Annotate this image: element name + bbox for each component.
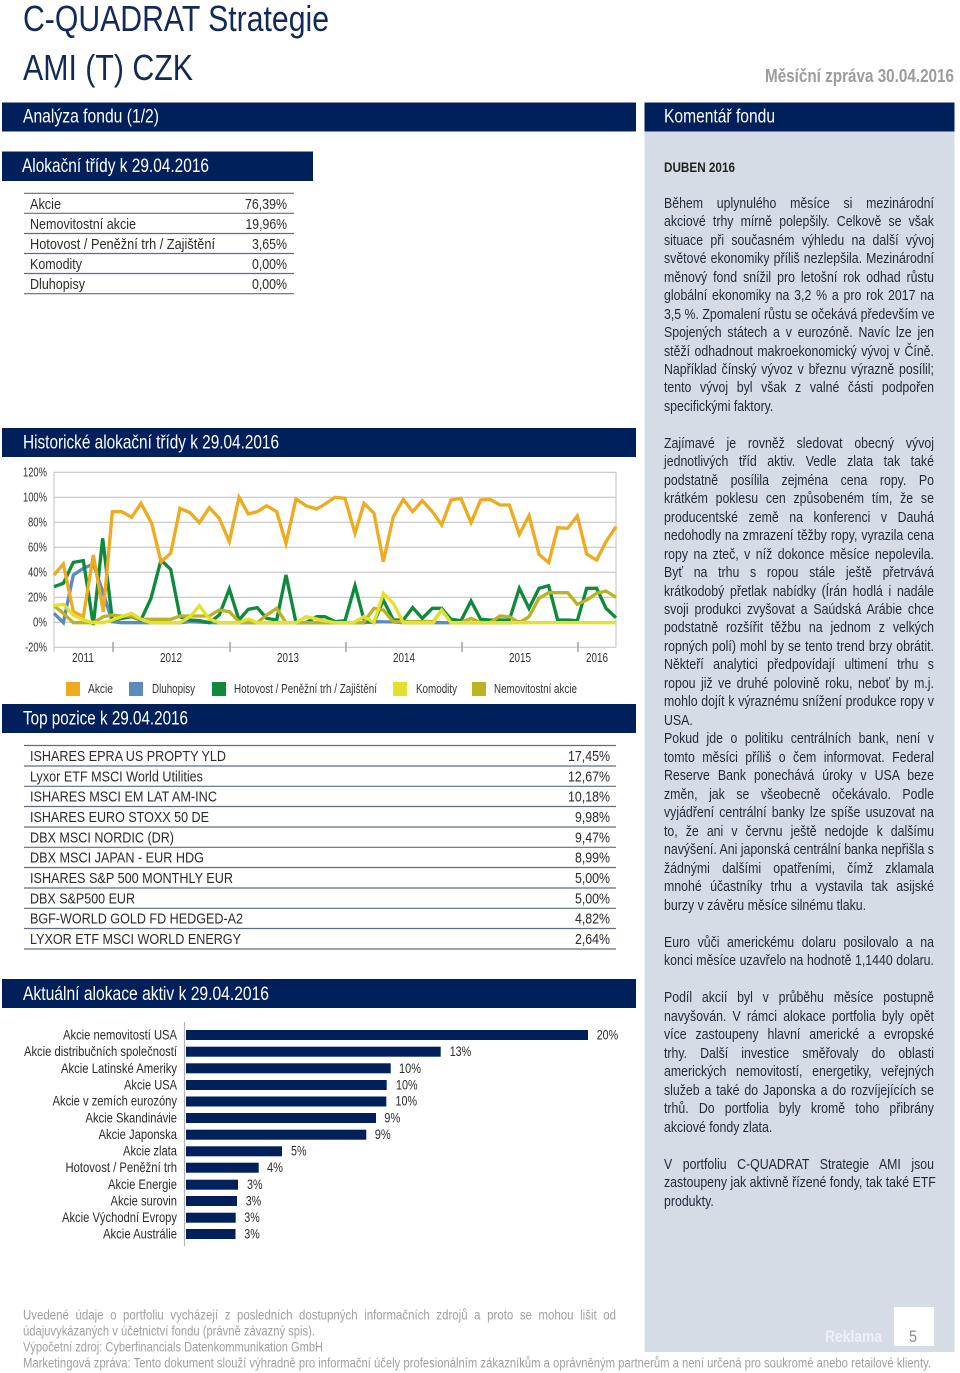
commentary paragraph: asset classes and central banks: USA. <box>664 713 693 729</box>
commentary paragraph: portfolio composition: produkty. <box>664 1194 714 1210</box>
heading: allocation classes <box>2 152 313 181</box>
line chart: historical allocation: 60% <box>28 540 47 554</box>
heading: current asset allocation <box>2 979 636 1008</box>
commentary paragraph: portfolio changes: více zastoupeny hlavní americké a evropské <box>664 1027 934 1043</box>
bar chart: current asset allocation: Akcie Východní Evropy <box>62 1209 177 1225</box>
top positions table: 8,99% <box>575 850 610 867</box>
bar chart: current asset allocation: 9% <box>375 1126 391 1142</box>
commentary paragraph: portfolio changes: amerických nemovitostí, energetiky, veřejných <box>664 1064 934 1080</box>
commentary paragraph: portfolio changes: Podíl akcií byl v průběhu měsíce postupně <box>664 990 934 1006</box>
bar chart: current asset allocation: 4% <box>267 1159 283 1175</box>
top positions table: 10,18% <box>568 789 610 806</box>
top positions table: 4,82% <box>575 911 610 928</box>
footer disclaimer: údajuvykázaných v účetnictví fondu (právně závazný spis). <box>23 1324 315 1338</box>
commentary paragraph: asset classes and central banks: to, že ani v červnu ještě nedojde k dalšímu <box>664 824 934 840</box>
commentary paragraph: asset classes and central banks: vyjádření centrální banky lze spíše usuzovat na <box>664 805 934 821</box>
commentary paragraph: markets overview: Například čínský vývoz v březnu výrazně posílil; <box>664 362 934 378</box>
chart legend: Hotovost / Peněžní trh / Zajištění <box>234 682 377 696</box>
chart legend: Komodity <box>416 682 458 696</box>
commentary paragraph: asset classes and central banks: změn, jak se všeobecně očekávalo. Podle <box>664 787 934 803</box>
commentary paragraph: markets overview: globální ekonomiky na 3,2 % a pro rok 2017 na <box>664 288 934 304</box>
commentary paragraph: markets overview: Spojených státech a v eurozóně. Navíc lze jen <box>664 325 934 341</box>
commentary paragraph: asset classes and central banks <box>664 436 934 914</box>
commentary paragraph: euro: Euro vůči americkému dolaru posilovalo a na <box>664 935 934 951</box>
allocation table: Nemovitostní akcie <box>30 216 136 233</box>
commentary paragraph: asset classes and central banks: navýšení. Ani japonská centrální banka nepřišla s <box>664 842 934 858</box>
bar chart: current asset allocation: 10% <box>396 1076 418 1092</box>
bar chart: current asset allocation: Akcie Japonska <box>98 1126 177 1142</box>
top positions table: Lyxor ETF MSCI World Utilities <box>30 768 203 785</box>
footer disclaimer: Uvedené údaje o portfoliu vycházejí z posledních dostupných informačních zdrojů a proto se mohou lišit od <box>23 1308 616 1322</box>
commentary paragraph: portfolio changes: akciové fondy zlata. <box>664 1120 772 1136</box>
bar chart: current asset allocation: Akcie USA <box>124 1076 178 1092</box>
bar chart: current asset allocation: 13% <box>450 1043 471 1059</box>
commentary paragraph: asset classes and central banks: podstatně posílila zejména cena ropy. Po <box>664 473 934 489</box>
commentary paragraph: portfolio changes: navyšován. V rámci alokace portfolia byly opět <box>664 1009 934 1025</box>
bar chart: current asset allocation: Akcie Latinské Ameriky <box>61 1060 177 1076</box>
heading: top positions <box>2 704 636 733</box>
title <box>23 0 329 88</box>
line chart: historical allocation: 2014 <box>393 651 415 665</box>
heading: fund analysis <box>2 102 636 132</box>
right commentary panel background <box>644 131 954 1352</box>
bar chart: current asset allocation: 3% <box>244 1226 260 1242</box>
bar chart: current asset allocation: Hotovost / Peněžní trh <box>66 1159 177 1175</box>
bar chart: current asset allocation: 10% <box>399 1060 421 1076</box>
commentary paragraph: asset classes and central banks: žádnými dalšími opatřeními, čímž zklamala <box>664 861 934 877</box>
commentary paragraph: asset classes and central banks: ropou již ve druhé polovině roku, neboť by m.j. <box>664 676 934 692</box>
line chart: historical allocation: 2015 <box>509 651 531 665</box>
top positions table: 12,67% <box>568 768 610 785</box>
top positions table: DBX MSCI NORDIC (DR) <box>30 829 174 846</box>
commentary paragraph: portfolio composition: zastoupeny jak aktivně řízené fondy, tak také ETF <box>664 1175 936 1191</box>
commentary month heading: DUBEN 2016 <box>664 159 735 175</box>
commentary paragraph: asset classes and central banks: Zajímavé je rovněž sledovat obecný vývoj <box>664 436 934 452</box>
bar chart: current asset allocation: 20% <box>597 1026 618 1042</box>
commentary paragraph: euro: konci měsíce uzavřelo na hodnotě 1,1440 dolaru. <box>664 953 934 969</box>
chart legend: Akcie <box>88 682 113 696</box>
line chart: historical allocation: 40% <box>28 566 47 580</box>
bar chart: current asset allocation <box>24 1022 618 1246</box>
commentary paragraph: portfolio changes <box>664 990 934 1136</box>
title: AMI (T) CZK <box>23 47 193 88</box>
commentary paragraph: asset classes and central banks: burzy v závěru měsíce silnému tlaku. <box>664 898 866 914</box>
allocation table: 3,65% <box>252 236 287 253</box>
commentary paragraph: portfolio composition <box>664 1157 936 1210</box>
commentary paragraph: asset classes and central banks: Byť na trhu s ropou stále ještě přetrvává <box>664 565 934 581</box>
page number box <box>894 1307 934 1346</box>
commentary paragraph: asset classes and central banks: jednotlivých tříd aktiv. Vedle zlata tak také <box>664 454 934 470</box>
line chart: historical allocation: 2016 <box>586 651 608 665</box>
heading: top positions: Top pozice k 29.04.2016 <box>23 708 188 730</box>
chart legend: Dluhopisy <box>152 682 196 696</box>
commentary paragraph: markets overview: měnový fond snížil pro letošní rok odhad růstu <box>664 270 934 286</box>
heading: allocation classes: Alokační třídy k 29.04.2016 <box>22 155 209 177</box>
allocation table: Komodity <box>30 256 82 273</box>
commentary paragraph: asset classes and central banks: mnohé účastníky trhu a vystavila tak asijské <box>664 879 934 895</box>
bar chart: current asset allocation: 3% <box>246 1192 261 1208</box>
line chart: historical allocation: 2011 <box>72 651 94 665</box>
commentary paragraph: euro <box>664 935 934 969</box>
commentary paragraph: asset classes and central banks: svoji produkci zvyšovat a Saúdská Arábie chce <box>664 602 934 618</box>
commentary paragraph: markets overview: situace při současném výhledu na další vývoj <box>664 233 934 249</box>
commentary paragraph: markets overview: tento vývoj byl však z valné části podpořen <box>664 380 934 396</box>
heading: fund commentary: Komentář fondu <box>664 106 775 128</box>
allocation table: 0,00% <box>252 256 287 273</box>
top positions table: DBX MSCI JAPAN - EUR HDG <box>30 850 204 867</box>
commentary paragraph: asset classes and central banks: nedohodly na zmrazení těžby ropy, vyrazila cena <box>664 528 934 544</box>
bar chart: current asset allocation: Akcie zlata <box>123 1142 177 1158</box>
bar chart: current asset allocation: Akcie Austrálie <box>103 1226 177 1242</box>
commentary paragraph: portfolio changes: služeb a také do Japonska a do rozvíjejících se <box>664 1083 934 1099</box>
commentary paragraph: portfolio changes: trhů. Do portfolia byly kromě toho přibrány <box>664 1101 934 1117</box>
top positions table <box>24 746 616 949</box>
line chart: historical allocation: 2013 <box>277 651 299 665</box>
commentary paragraph: markets overview: specifickými faktory. <box>664 399 773 415</box>
bar chart: current asset allocation: 5% <box>291 1142 306 1158</box>
chart legend <box>66 682 577 696</box>
commentary paragraph: asset classes and central banks: ropy na zteč, v níž dokonce měsíce nepolevila. <box>664 547 934 563</box>
bar chart: current asset allocation: Akcie Skandinávie <box>86 1110 177 1126</box>
page number box: 5 <box>909 1327 917 1346</box>
top positions table: 17,45% <box>568 748 610 765</box>
commentary paragraph: asset classes and central banks: ropných polí) mohl by se tento trend brzy obrátit. <box>664 639 934 655</box>
bar chart: current asset allocation: Akcie nemovitostí USA <box>63 1026 178 1042</box>
allocation table: Dluhopisy <box>30 276 85 293</box>
footer disclaimer: Výpočetní zdroj: Cyberfinancials Datenkommunikation GmbH <box>23 1340 323 1354</box>
bar chart: current asset allocation: 9% <box>384 1110 400 1126</box>
commentary paragraph: markets overview: světové ekonomiky příliš nezlepšila. Mezinárodní <box>664 251 934 267</box>
allocation table: Akcie <box>30 196 61 213</box>
heading: fund analysis: Analýza fondu (1/2) <box>23 106 159 128</box>
commentary paragraph: portfolio changes: trhy. Další investice směřovaly do oblasti <box>664 1046 934 1062</box>
top positions table: DBX S&P500 EUR <box>30 890 135 907</box>
commentary paragraph: asset classes and central banks: Někteří analytici předpovídají ultimení trhu s <box>664 657 934 673</box>
heading: current asset allocation: Aktuální alokace aktiv k 29.04.2016 <box>23 983 269 1005</box>
commentary paragraph: asset classes and central banks: krátkodobý přetlak nabídky (Írán hodlá i nadále <box>664 584 934 600</box>
line chart: historical allocation: 0% <box>33 616 47 630</box>
line chart: historical allocation <box>23 466 616 665</box>
commentary paragraph: asset classes and central banks: krátkém poklesu cen způsobeném tím, že se <box>664 491 934 507</box>
commentary paragraph: asset classes and central banks: Reserve Bank ponechává úroky v USA beze <box>664 768 934 784</box>
commentary paragraph: markets overview: Během uplynulého měsíce si mezinárodní <box>664 196 934 212</box>
top positions table: BGF-WORLD GOLD FD HEDGED-A2 <box>30 911 243 928</box>
heading: fund commentary <box>644 102 954 132</box>
heading: historical allocation: Historické alokační třídy k 29.04.2016 <box>23 432 279 454</box>
commentary paragraph: asset classes and central banks: podstatně rozšířit těžbu na jednom z velkých <box>664 620 934 636</box>
line chart: historical allocation: 120% <box>23 466 47 480</box>
allocation table: Hotovost / Peněžní trh / Zajištění <box>30 236 216 253</box>
allocation table: 19,96% <box>246 216 287 233</box>
bar chart: current asset allocation: Akcie distribučních společností <box>24 1043 177 1059</box>
commentary paragraph: markets overview: akciové trhy mírně polepšily. Celkově se však <box>664 214 934 230</box>
top positions table: ISHARES EPRA US PROPTY YLD <box>30 748 226 765</box>
top positions table: ISHARES S&P 500 MONTHLY EUR <box>30 870 233 887</box>
allocation table: 76,39% <box>245 196 287 213</box>
bar chart: current asset allocation: Akcie surovin <box>110 1192 177 1208</box>
commentary paragraph: asset classes and central banks: producentské země na konferenci v Dauhá <box>664 510 934 526</box>
top positions table: LYXOR ETF MSCI WORLD ENERGY <box>30 931 241 948</box>
commentary paragraph: asset classes and central banks: mohlo dojít k výraznému snížení produkce ropy v <box>664 694 934 710</box>
top positions table: 5,00% <box>575 870 610 887</box>
footer disclaimer <box>23 1308 931 1370</box>
line chart: historical allocation: -20% <box>25 640 47 654</box>
chart legend: Nemovitostní akcie <box>494 682 577 696</box>
top positions table: 2,64% <box>575 931 610 948</box>
commentary paragraph: markets overview <box>664 196 935 415</box>
top positions table: ISHARES EURO STOXX 50 DE <box>30 809 209 826</box>
top positions table: 9,47% <box>575 829 610 846</box>
commentary paragraph: markets overview: stěží odhadnout makroekonomický vývoj v Číně. <box>664 344 934 360</box>
commentary paragraph: asset classes and central banks: tomto měsíci příliš o čem informovat. Federal <box>664 750 934 766</box>
line chart: historical allocation: 2012 <box>160 651 182 665</box>
heading: historical allocation <box>2 428 636 457</box>
line chart: historical allocation: 100% <box>23 490 47 504</box>
bar chart: current asset allocation: 3% <box>247 1176 262 1192</box>
top positions table: 5,00% <box>575 890 610 907</box>
bar chart: current asset allocation: Akcie Energie <box>108 1176 177 1192</box>
allocation table: 0,00% <box>252 276 287 293</box>
commentary paragraph: markets overview: 3,5 %. Zpomalení růstu se očekává především ve <box>664 307 935 323</box>
bar chart: current asset allocation: Akcie v zemích eurozóny <box>52 1092 177 1108</box>
commentary paragraph: asset classes and central banks: Pokud jde o politiku centrálních bank, není v <box>664 731 934 747</box>
allocation table <box>24 193 294 294</box>
bar chart: current asset allocation: 3% <box>244 1209 260 1225</box>
top positions table: ISHARES MSCI EM LAT AM-INC <box>30 789 217 806</box>
top positions table: 9,98% <box>575 809 610 826</box>
line chart: historical allocation: 80% <box>28 516 47 530</box>
commentary paragraph: portfolio composition: V portfoliu C-QUADRAT Strategie AMI jsou <box>664 1157 934 1173</box>
advertising label: Reklama <box>825 1327 882 1346</box>
bar chart: current asset allocation: 10% <box>396 1092 417 1108</box>
line chart: historical allocation: 20% <box>28 590 47 604</box>
